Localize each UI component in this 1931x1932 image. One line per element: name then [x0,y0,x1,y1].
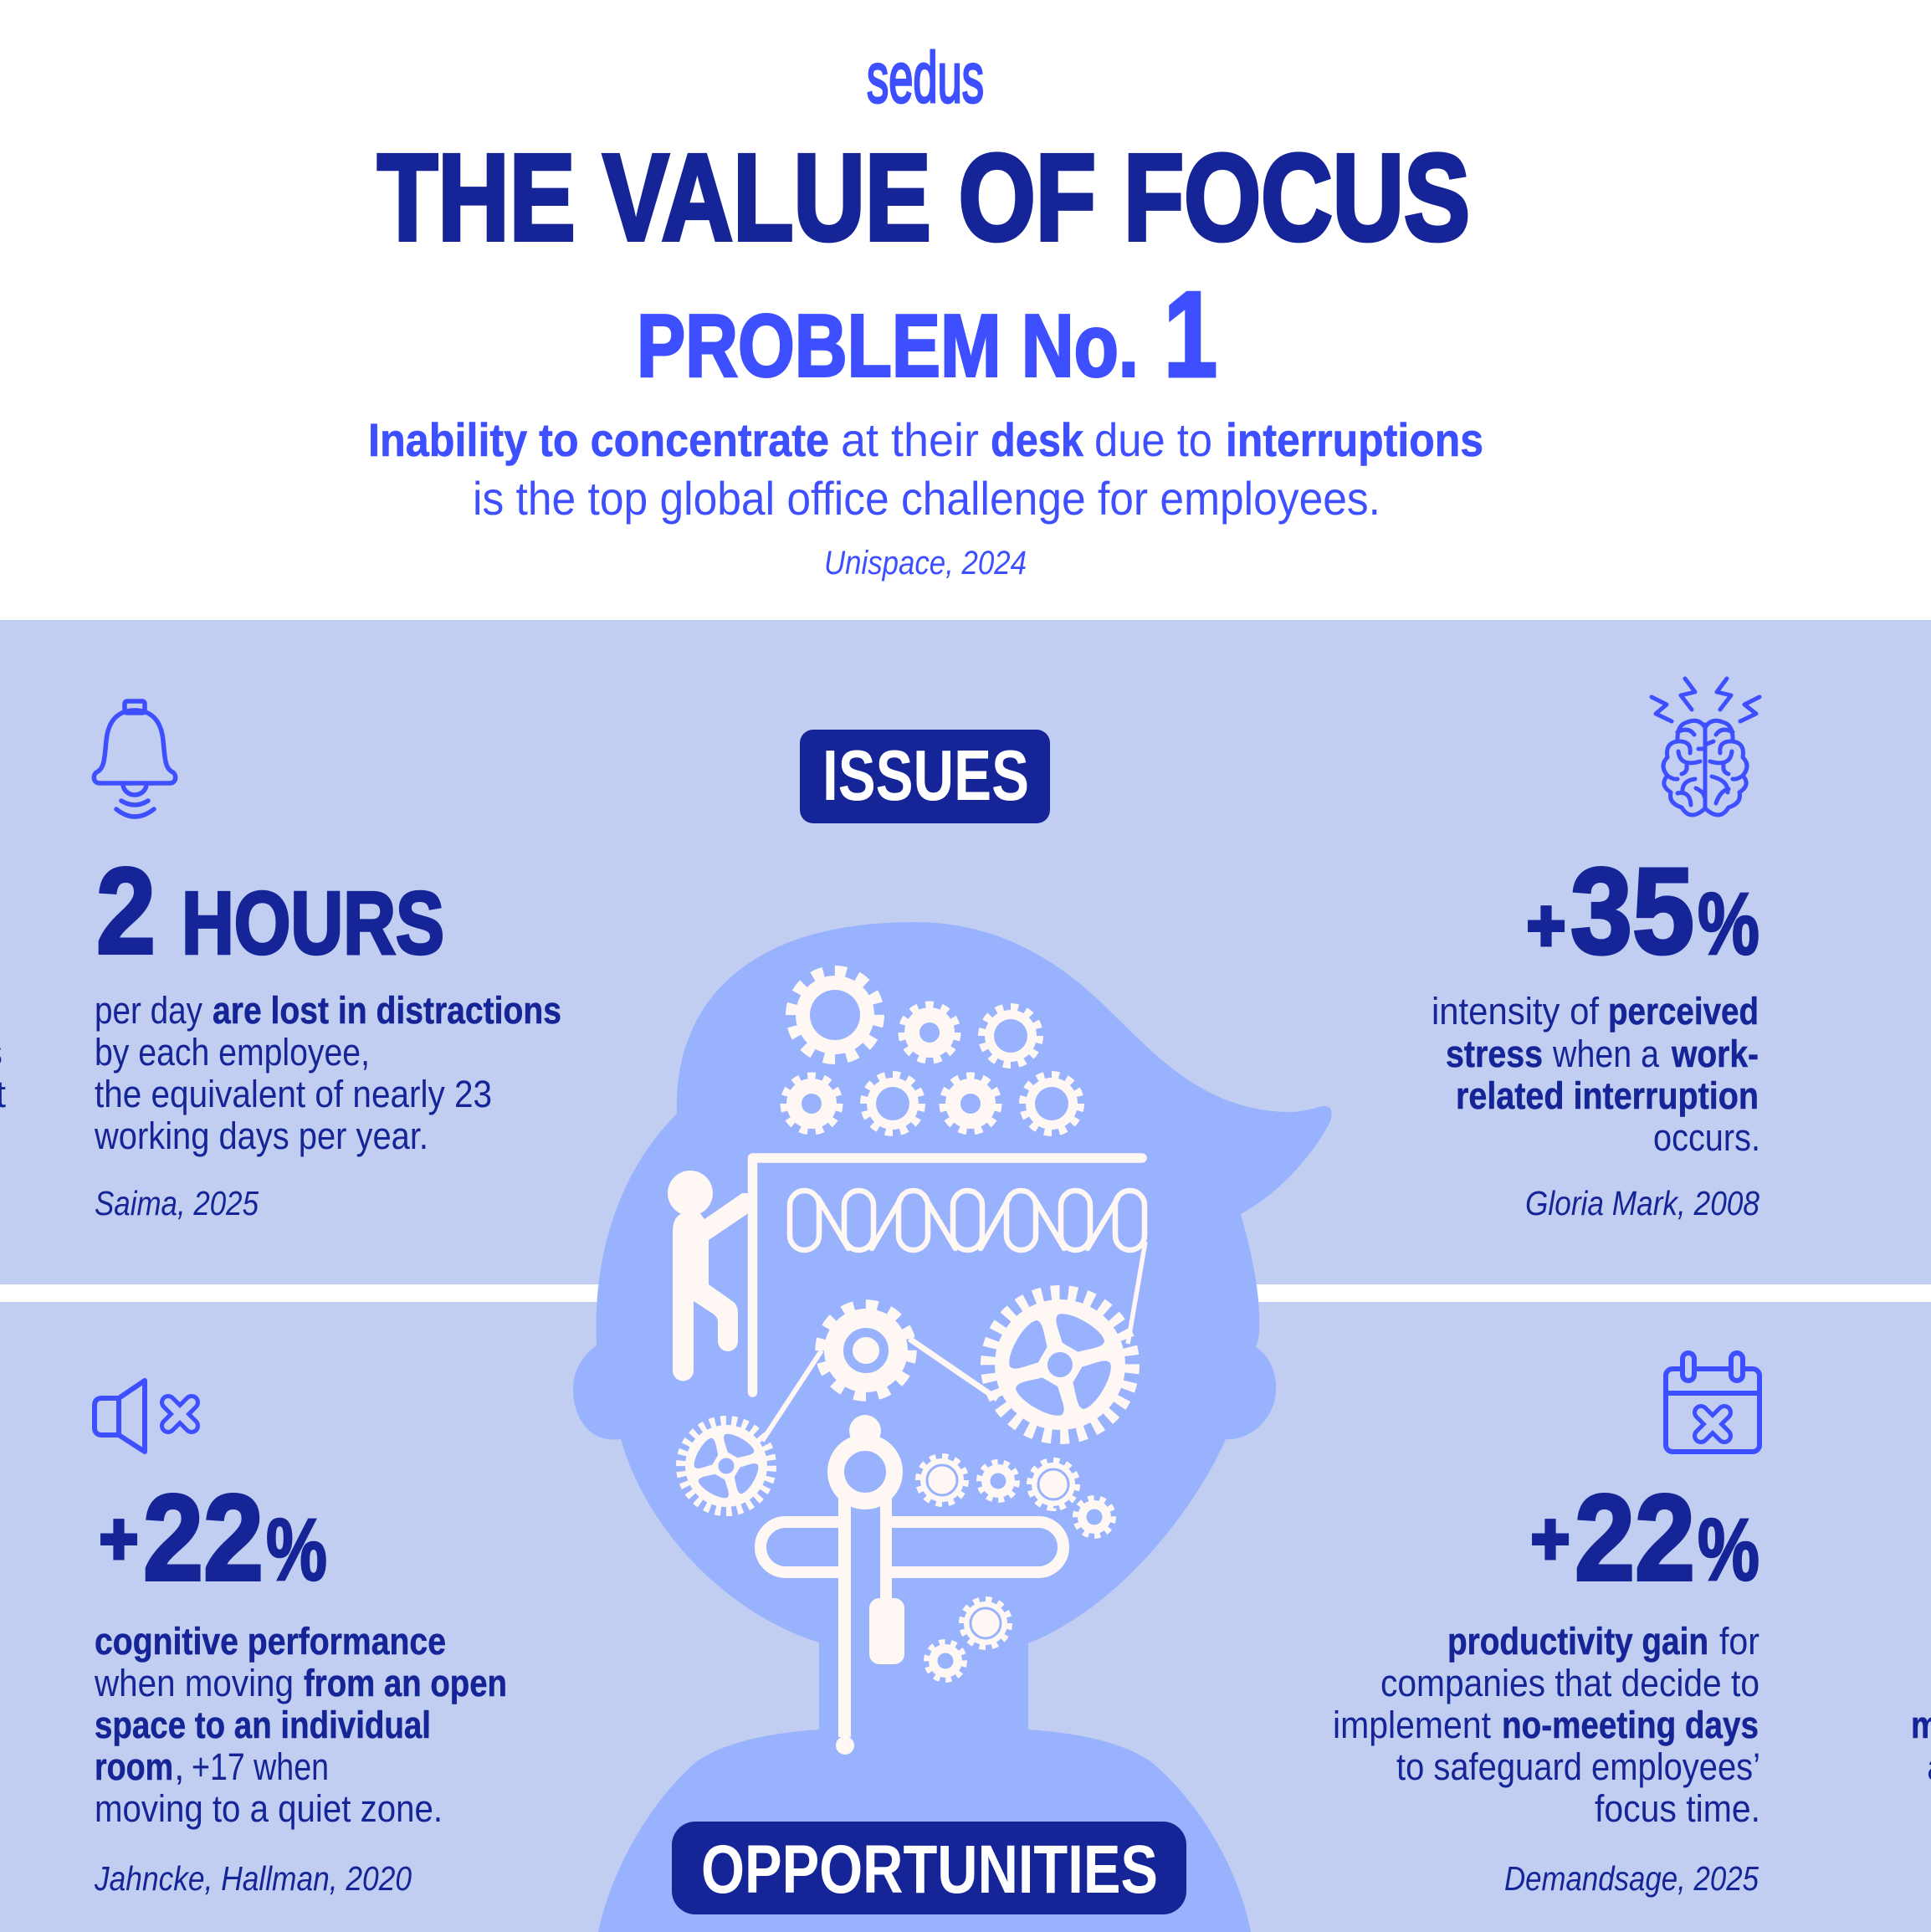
stat: +35%: % [1698,875,1759,973]
badge: opportunities [672,1822,1186,1914]
text: cognitive description: when moving [94,1662,294,1704]
frame: board the figure pushes [753,1158,1142,1392]
gear: medium ring [820,1304,912,1396]
text: stress description: related interruption [1456,1074,1759,1117]
panel: upper issues background [0,620,1931,1284]
gear: top right [982,1007,1039,1064]
stat: +22% right: 22 [1575,1469,1695,1606]
badge: opportunities: OPPORTUNITIES [701,1832,1158,1908]
belt: medium gear to large gear [909,1339,997,1399]
text: productivity description: focus time. [1595,1787,1760,1830]
stat: +35%: + [1527,885,1565,966]
text: productivity description: for [1719,1620,1759,1663]
text: productivity description: companies that decide to [1380,1662,1759,1704]
figure: person pushing frame [668,1171,750,1381]
stat: +22% left: 22 [143,1469,264,1606]
intro text: desk [991,413,1084,466]
intro text [368,413,1483,525]
text: cognitive description: space to an individual [95,1704,431,1746]
gear: neck upper [962,1600,1009,1647]
stat: +22% left: + [100,1499,138,1580]
gear: row two, third [943,1076,998,1131]
cropped neighbouring text at page edges [0,1031,1931,1788]
stat: +22% left: % [266,1501,327,1599]
header block [368,38,1483,582]
text: cognitive description: +17 when [192,1745,329,1788]
coil: spring loops [790,1191,1145,1250]
text: productivity description [1333,1620,1760,1830]
intro text: Inability to concentrate [368,413,829,466]
text: 2 hours description: per day [95,989,202,1032]
gear: small row two [979,1463,1017,1499]
stat: +22% left [100,1469,327,1606]
text: cognitive description: cognitive performance [95,1620,446,1663]
stat: +22% right: + [1531,1499,1570,1580]
illustration: head silhouette with brain machinery [573,922,1332,1932]
badge: issues [800,730,1050,823]
gear: row two, fourth [1022,1074,1081,1133]
belt: small spoked gear to medium gear [762,1350,822,1441]
panel: lower opportunities background [0,1302,1931,1932]
gear: small row one [919,1456,966,1504]
intro text: at their [841,413,979,466]
source: Demandsage: Demandsage, 2025 [1504,1859,1759,1898]
icon: calendar with cross [1666,1353,1759,1452]
logo: sedus: sedus [867,38,984,118]
panel: stress increase [1432,679,1760,1222]
badge: issues: ISSUES [822,736,1029,816]
text: cognitive description: moving to a quiet zone. [95,1787,443,1830]
text: productivity description: no-meeting days [1502,1704,1759,1746]
stat: 2 hours [96,843,444,979]
text: stress description: stress [1446,1033,1543,1075]
gear: small row three [1029,1461,1078,1508]
text: productivity description: productivity gain [1447,1620,1708,1663]
text: stress description: occurs. [1653,1116,1760,1159]
gear: top middle [902,1005,957,1060]
text: stress description [1432,990,1760,1159]
text: cognitive description: room [95,1745,173,1788]
head silhouette [573,922,1332,1932]
gear: row two, first [784,1076,839,1131]
gear: large top [791,971,878,1059]
intro text: is the top global office challenge for employees. [473,472,1380,525]
stat: +22% right [1531,1469,1759,1606]
text: cognitive description: from an open [304,1662,507,1704]
lever: slider mechanism [761,1415,1063,1755]
gear: small spoked [681,1421,771,1511]
text: cognitive description: , [174,1745,185,1788]
stat: 2 hours: HOURS [182,874,444,972]
gear: small row four [1076,1498,1113,1536]
text: 2 hours description: are lost in distractions [213,989,561,1032]
panel: 2 hours lost [94,701,561,1222]
text: 2 hours description: the equivalent of nearly 23 [95,1073,492,1115]
stat: +35%: 35 [1570,843,1694,979]
gear: large spoked [988,1293,1132,1437]
heading: problem number one: 1 [1164,266,1217,402]
icon: bell [94,701,176,817]
source: Gloria Mark: Gloria Mark, 2008 [1525,1184,1759,1222]
text: 2 hours description: by each employee, [95,1031,370,1074]
intro text: interruptions [1226,413,1483,466]
title: THE VALUE OF FOCUS [377,129,1470,266]
stat: 2 hours: 2 [96,843,156,979]
text: productivity description: to safeguard employees’ [1396,1745,1760,1788]
text: 2 hours description [94,989,561,1157]
panel: cognitive performance [94,1381,507,1898]
heading: problem number one: PROBLEM No. [637,296,1139,395]
gear: neck lower [927,1642,964,1680]
panel: productivity gain [1333,1353,1760,1898]
stat: +22% right: % [1698,1501,1759,1599]
source: Jahncke, Hallman: Jahncke, Hallman, 2020 [94,1859,412,1898]
icon: muted speaker [95,1381,192,1452]
belt: coil to large gear [1128,1242,1145,1344]
text: productivity description: implement [1333,1704,1491,1746]
intro text: due to [1094,413,1212,466]
text: stress description: when a [1552,1033,1660,1075]
source: Saima: Saima, 2025 [95,1184,259,1222]
icon: brain with bolts [1652,679,1759,815]
source: Unispace: Unispace, 2024 [824,545,1027,582]
gear: row two, second [863,1074,922,1133]
text: stress description: intensity of [1432,990,1599,1033]
text: stress description: perceived [1608,990,1759,1033]
text: cognitive description [94,1620,507,1830]
text: stress description: work- [1671,1033,1759,1075]
text: 2 hours description: working days per year. [94,1115,428,1157]
stat: +35% [1527,843,1759,979]
